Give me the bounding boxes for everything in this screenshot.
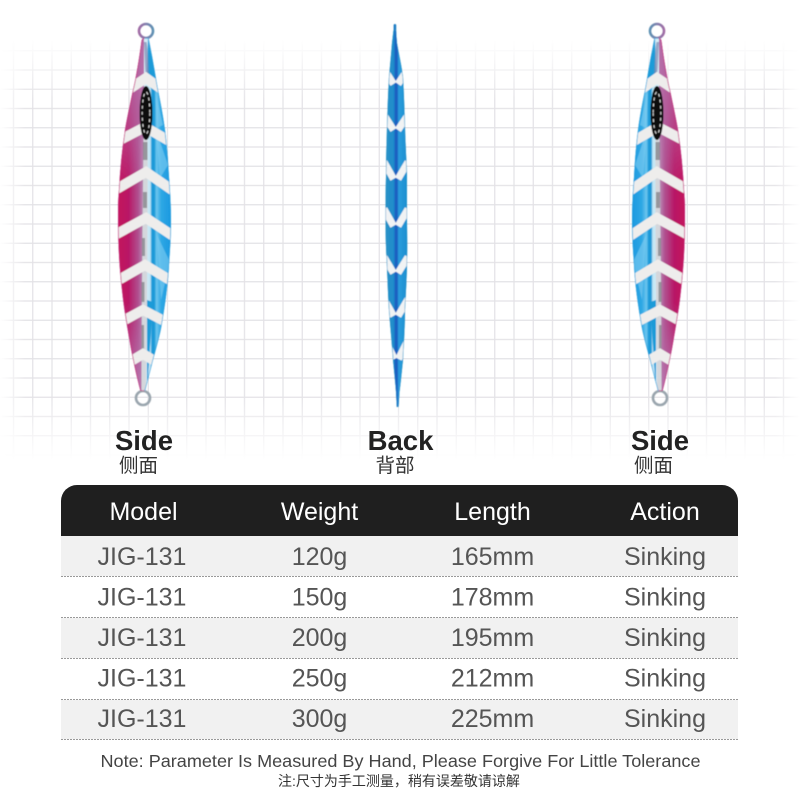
note: 注:尺寸为手工测量，稍有误差敬请谅解 [278, 773, 520, 789]
row: 200g: 195mm [451, 624, 534, 652]
table header: Action [630, 498, 700, 526]
note [100, 751, 700, 789]
note: Note: Parameter Is Measured By Hand, Please Forgive For Little Tolerance [100, 751, 700, 771]
label: back: Back [368, 425, 434, 456]
row: 200g: Sinking [624, 624, 706, 652]
row: 150g [61, 577, 738, 618]
row: 300g: 300g [292, 705, 347, 733]
row: 120g: 165mm [451, 543, 534, 571]
row: 250g: 212mm [451, 664, 534, 692]
row: 200g: JIG-131 [98, 624, 186, 652]
row: 150g: JIG-131 [98, 584, 186, 612]
row: 120g: Sinking [624, 543, 706, 571]
table header: Model [109, 498, 178, 526]
label: right side: Side [631, 425, 689, 456]
label: right side [631, 425, 689, 477]
row: 150g: Sinking [624, 584, 706, 612]
row: 300g [61, 700, 738, 740]
row: 250g: 250g [292, 664, 347, 692]
row: 200g: 200g [292, 624, 347, 652]
row: 250g [61, 659, 738, 700]
row: 300g: 225mm [451, 705, 534, 733]
label: back: 背部 [375, 455, 415, 477]
label: left side: Side [115, 425, 173, 456]
label: right side: 侧面 [634, 455, 673, 477]
row: 300g: JIG-131 [98, 705, 186, 733]
row: 250g: Sinking [624, 664, 706, 692]
row: 250g: JIG-131 [98, 664, 186, 692]
jig: left side view [110, 24, 176, 405]
label: left side [115, 425, 173, 477]
table header: Length [454, 498, 531, 526]
label: left side: 侧面 [119, 455, 158, 477]
row: 300g: Sinking [624, 705, 706, 733]
jig: right side view [627, 24, 693, 405]
row: 150g: 150g [292, 584, 347, 612]
background grid [0, 40, 800, 460]
row: 150g: 178mm [451, 584, 534, 612]
table header [61, 485, 738, 536]
row: 120g [61, 536, 738, 576]
row: 120g: 120g [292, 543, 347, 571]
table header: Weight [281, 498, 358, 526]
row: 200g [61, 618, 738, 658]
specification table [61, 485, 738, 740]
jig: back view [384, 23, 408, 408]
label: back [368, 425, 434, 477]
row: 120g: JIG-131 [98, 543, 186, 571]
